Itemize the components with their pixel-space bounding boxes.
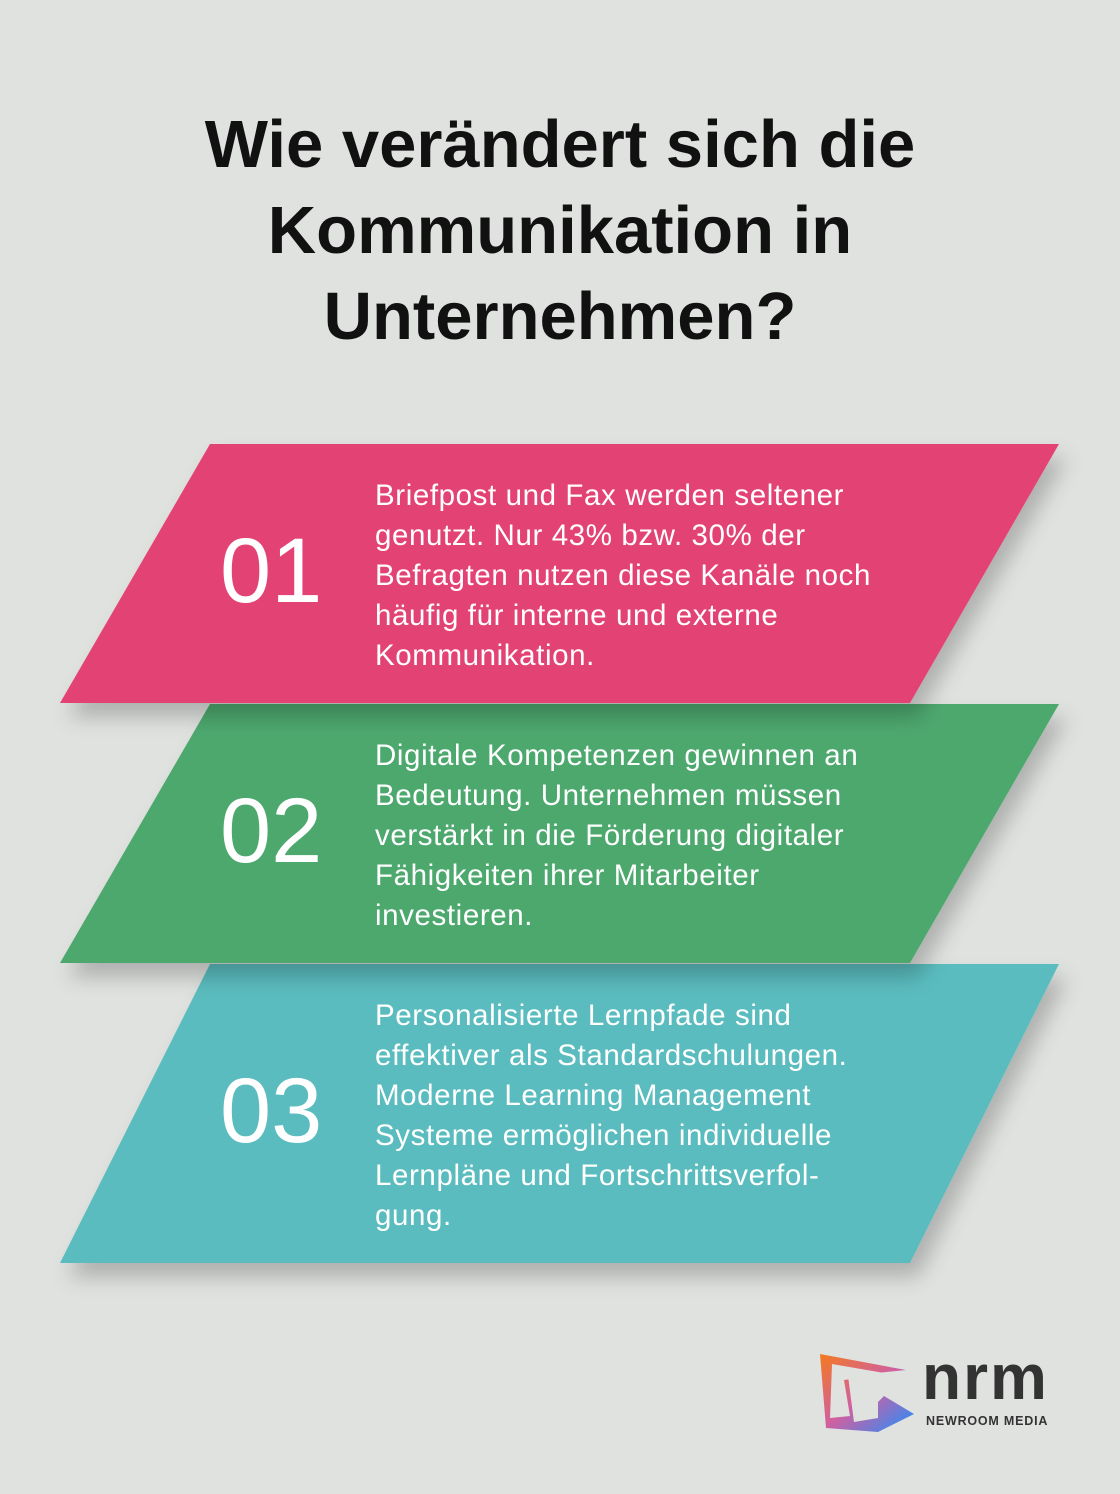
text 03: Systeme ermöglichen individuelle bbox=[375, 1119, 832, 1152]
text 02 bbox=[375, 739, 858, 932]
panel: 03 bbox=[60, 964, 1070, 1286]
text 02: Digitale Kompetenzen gewinnen an bbox=[375, 739, 858, 772]
text 03: Lernpläne und Fortschrittsverfol- bbox=[375, 1159, 819, 1192]
title bbox=[204, 107, 915, 354]
number 03: 03 bbox=[220, 1060, 322, 1162]
title: Unternehmen? bbox=[324, 279, 796, 354]
text 03: Moderne Learning Management bbox=[375, 1079, 811, 1112]
text 02: verstärkt in die Förderung digitaler bbox=[375, 819, 844, 852]
text 03 bbox=[375, 999, 847, 1232]
text 01: Briefpost und Fax werden seltener bbox=[375, 479, 844, 512]
title: Wie verändert sich die bbox=[205, 107, 915, 182]
text 01: Kommunikation. bbox=[375, 639, 595, 672]
panel: 01 bbox=[60, 444, 1069, 726]
panel: 02 bbox=[60, 704, 1069, 986]
logo: nrm bbox=[922, 1341, 1049, 1413]
text 01 bbox=[375, 479, 871, 672]
logo: NEWROOM MEDIA bbox=[926, 1414, 1048, 1428]
number 01: 01 bbox=[220, 520, 322, 622]
title: Kommunikation in bbox=[268, 193, 852, 268]
text 02: Bedeutung. Unternehmen müssen bbox=[375, 779, 842, 812]
text 01: Befragten nutzen diese Kanäle noch bbox=[375, 559, 871, 592]
number 02: 02 bbox=[220, 780, 322, 882]
text 03: effektiver als Standardschulungen. bbox=[375, 1039, 847, 1072]
logo bbox=[820, 1341, 1049, 1432]
text 02: investieren. bbox=[375, 899, 533, 932]
text 01: genutzt. Nur 43% bzw. 30% der bbox=[375, 519, 806, 552]
text 01: häufig für interne und externe bbox=[375, 599, 778, 632]
text 02: Fähigkeiten ihrer Mitarbeiter bbox=[375, 859, 760, 892]
text 03: gung. bbox=[375, 1199, 452, 1232]
text 03: Personalisierte Lernpfade sind bbox=[375, 999, 792, 1032]
